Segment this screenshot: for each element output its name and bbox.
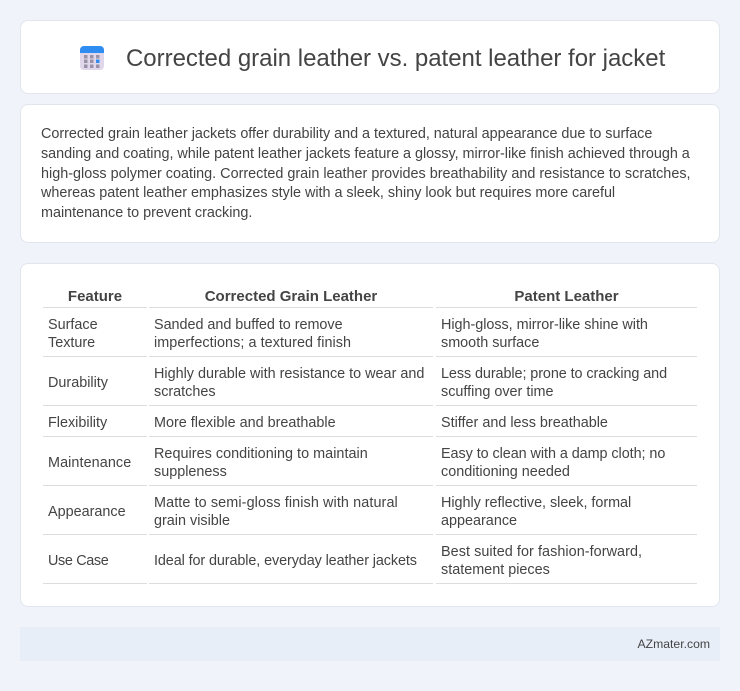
text block: summary paragraph: sanding and coating, while patent leather jackets feature a glossy, mirror-like finish achieved through a — [41, 146, 690, 162]
table row: use case: statement pieces — [441, 562, 550, 578]
title: Corrected grain leather vs. patent leather for jacket — [126, 45, 665, 72]
table row: use case: Ideal for durable, everyday leather jackets — [154, 553, 417, 569]
panel: title header — [20, 20, 720, 94]
table row: use case: Use Case — [48, 553, 108, 569]
table row: surface texture — [48, 317, 648, 351]
table row: surface texture: High-gloss, mirror-like shine with — [441, 317, 648, 333]
icon: calendar — [80, 46, 104, 70]
table row: surface texture: Surface — [48, 317, 98, 333]
table row: use case — [48, 544, 642, 578]
table row: surface texture: Sanded and buffed to remove — [154, 317, 343, 333]
table row: use case: Best suited for fashion-forward, — [441, 544, 642, 560]
text block: summary paragraph: whereas patent leather emphasizes style with a sleek, shiny look but requires more careful — [41, 185, 615, 201]
table row: flexibility — [48, 415, 608, 431]
table row: durability: Highly durable with resistance to wear and — [154, 366, 424, 382]
footer text: AZmater.com — [638, 637, 710, 651]
table row: maintenance: suppleness — [154, 464, 227, 480]
table row: flexibility: Stiffer and less breathable — [441, 415, 608, 431]
table row: appearance: Matte to semi-gloss finish with natural — [154, 495, 398, 511]
panel: comparison table — [20, 263, 720, 607]
table row: maintenance: Easy to clean with a damp cloth; no — [441, 446, 665, 462]
panel: summary — [20, 104, 720, 243]
table row: durability — [48, 366, 667, 400]
text block: summary paragraph: maintenance to prevent cracking. — [41, 205, 252, 221]
table row: durability: Durability — [48, 375, 108, 391]
text block: summary paragraph — [41, 126, 691, 221]
table row: durability: scuffing over time — [441, 384, 554, 400]
table row: surface texture: smooth surface — [441, 335, 539, 351]
table header: Feature — [68, 288, 122, 305]
table row: maintenance: Maintenance — [48, 455, 131, 471]
table row: flexibility: Flexibility — [48, 415, 107, 431]
table row: appearance — [48, 495, 631, 529]
table row: surface texture: imperfections; a textured finish — [154, 335, 351, 351]
text block: summary paragraph: high-gloss polymer coating. Corrected grain leather provides breathability and resistance to scratches, — [41, 166, 691, 182]
table header: Patent Leather — [514, 288, 619, 305]
table row: appearance: Highly reflective, sleek, formal — [441, 495, 631, 511]
table row: appearance: appearance — [441, 513, 517, 529]
table header: Corrected Grain Leather — [205, 288, 377, 305]
table row: maintenance — [48, 446, 665, 480]
table header — [68, 288, 619, 305]
table row: flexibility: More flexible and breathable — [154, 415, 336, 431]
table row: maintenance: Requires conditioning to maintain — [154, 446, 368, 462]
footer bar — [20, 627, 720, 661]
table row: durability: scratches — [154, 384, 216, 400]
table row: appearance: Appearance — [48, 504, 126, 520]
text block: summary paragraph: Corrected grain leather jackets offer durability and a textured, natural appearance due to surface — [41, 126, 652, 142]
table row: durability: Less durable; prone to cracking and — [441, 366, 667, 382]
table row: appearance: grain visible — [154, 513, 230, 529]
table row: surface texture: Texture — [48, 335, 95, 351]
table row: maintenance: conditioning needed — [441, 464, 570, 480]
